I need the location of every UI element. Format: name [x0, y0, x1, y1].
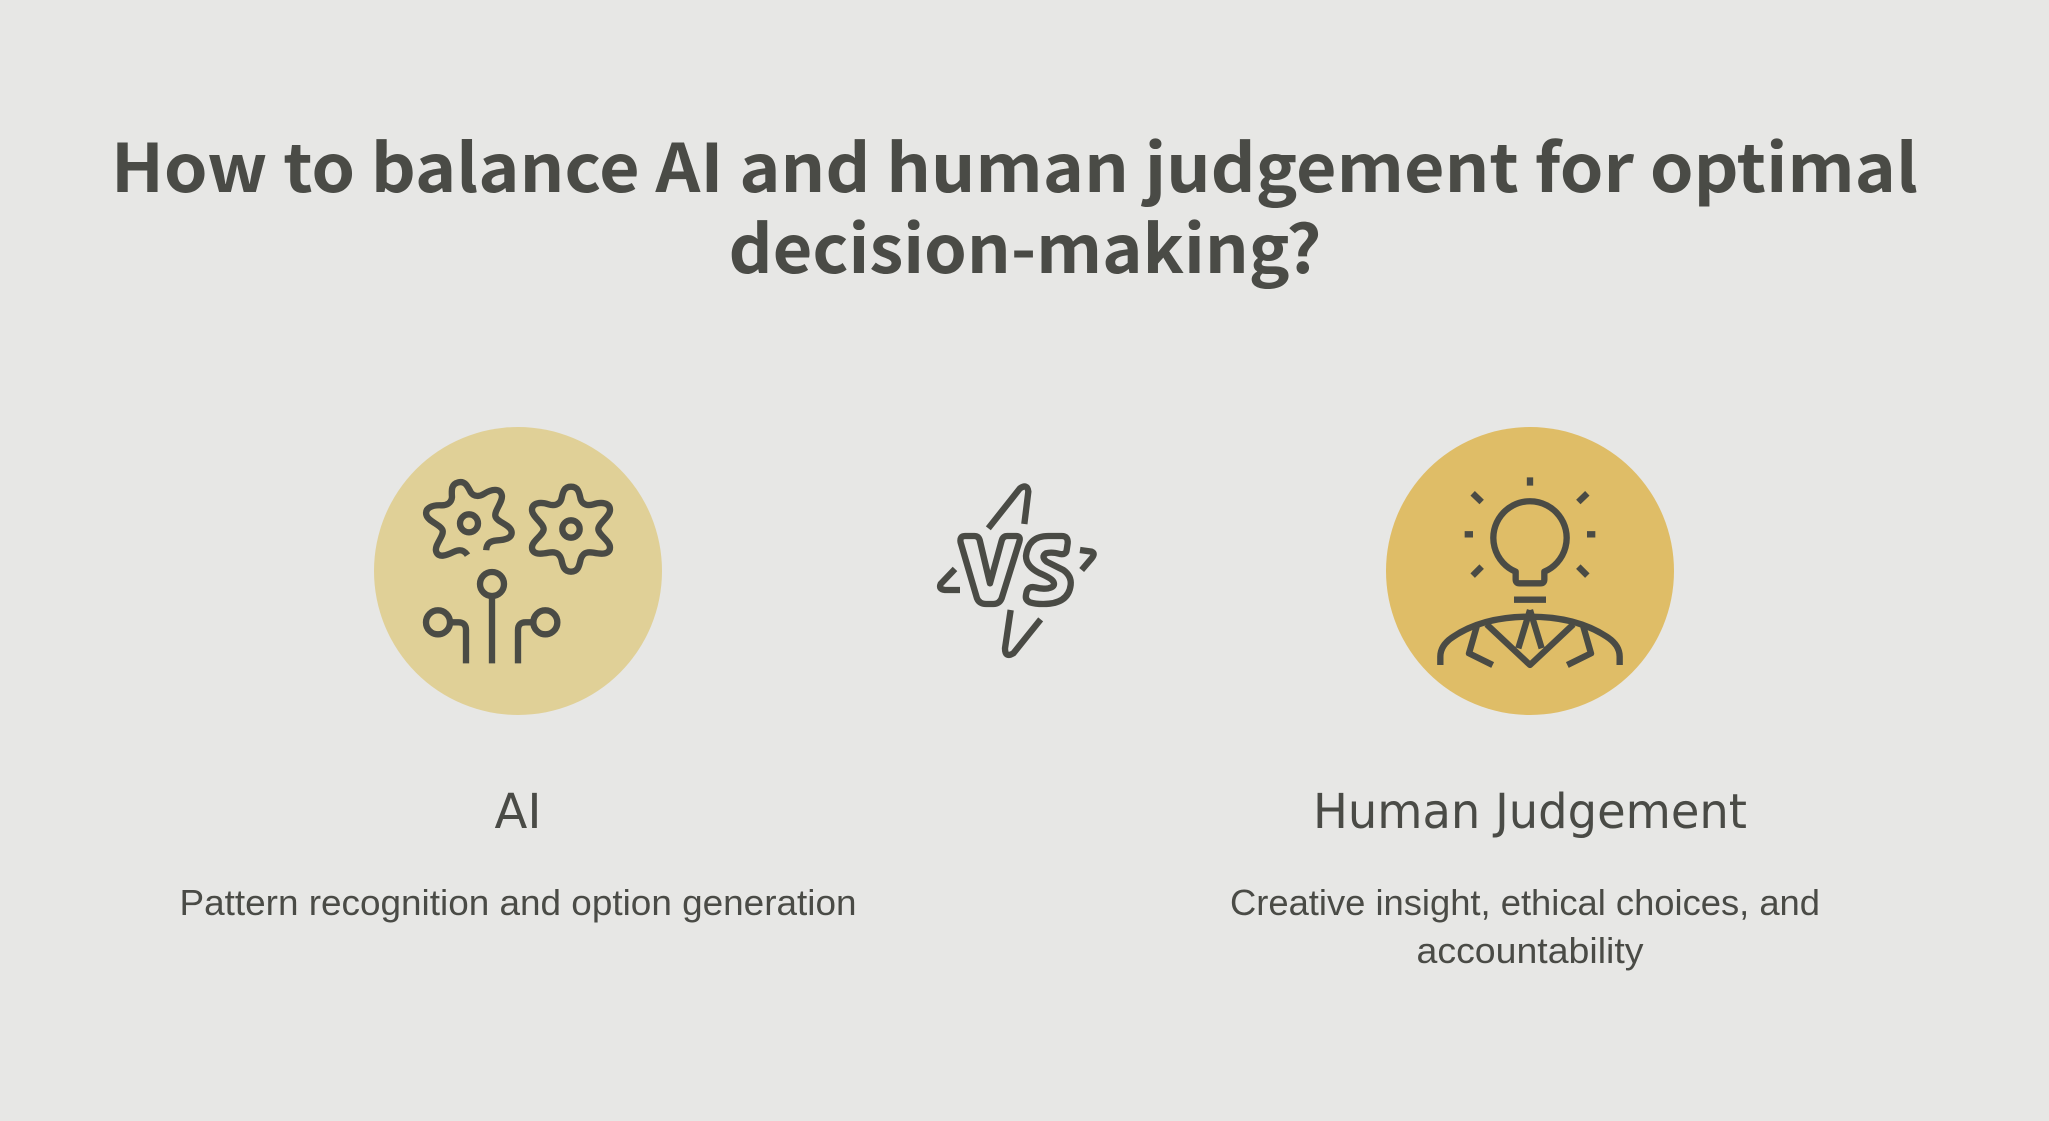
icon: VS lightning [940, 486, 1094, 655]
text: Human Judgement description [1230, 882, 1820, 971]
heading: AI: AI [494, 784, 542, 840]
title: How to balance AI and human judgement for optimal [111, 116, 1918, 212]
heading: Human Judgement: Human Judgement [1313, 784, 1747, 840]
text: AI description: Pattern recognition and option generation [180, 882, 856, 923]
title [111, 116, 1918, 293]
panel: Human Judgement [1230, 427, 1820, 971]
icon: gears and circuit in pale gold circle [374, 427, 662, 715]
text: Human Judgement description: Creative insight, ethical choices, and [1230, 882, 1820, 923]
icon: lightbulb over person in gold circle [1386, 427, 1674, 715]
title: decision-making? [728, 197, 1322, 293]
text: Human Judgement description: accountability [1416, 930, 1644, 971]
panel: AI [180, 427, 856, 923]
